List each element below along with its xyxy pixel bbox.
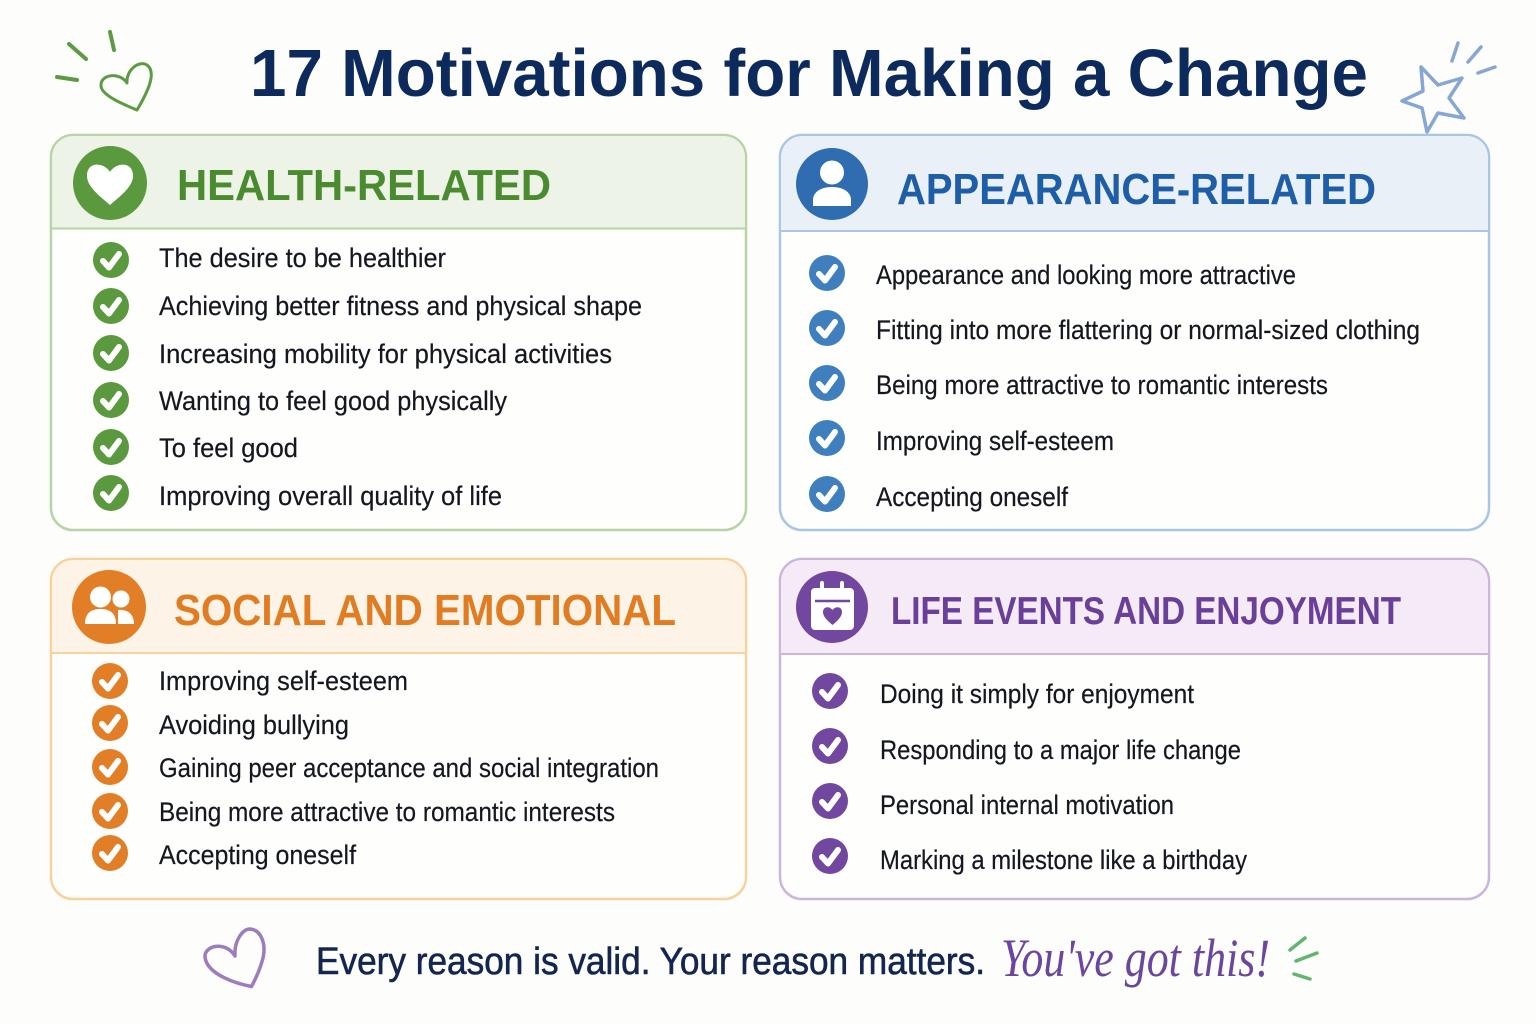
item: internal motivation: Personal internal motivation <box>880 790 1174 820</box>
icon: two people in orange circle <box>72 570 146 644</box>
item: better fitness <box>93 288 642 324</box>
item: to feel good: To feel good <box>159 433 298 463</box>
item: appearance <box>809 255 1296 291</box>
panel: health-related <box>51 135 746 530</box>
heading: social and emotional: SOCIAL AND EMOTIONAL <box>174 586 676 635</box>
panel: social and emotional <box>51 559 746 899</box>
item: quality of life: Improving overall quality of life <box>159 481 502 511</box>
title: 17 Motivations for Making a Change <box>250 36 1368 111</box>
item: romantic interests: Being more attractive to romantic interests <box>876 370 1328 400</box>
item: romantic interests: Being more attractive to romantic interests <box>159 797 615 827</box>
item: internal motivation <box>812 783 1174 820</box>
item: enjoyment: Doing it simply for enjoyment <box>880 679 1194 709</box>
item: avoiding bullying: Avoiding bullying <box>159 710 349 740</box>
item: quality of life <box>93 475 502 511</box>
item: milestone: Marking a milestone like a birthday <box>880 845 1247 875</box>
item: self-esteem <box>92 663 408 699</box>
item: self-esteem: Improving self-esteem <box>159 666 408 696</box>
icon: green rays <box>1290 938 1317 979</box>
item: accepting oneself <box>92 835 356 871</box>
item: appearance: Appearance and looking more attractive <box>876 260 1296 290</box>
item: feel good physically: Wanting to feel good physically <box>159 386 507 416</box>
item: better fitness: Achieving better fitness and physical shape <box>159 291 642 321</box>
item: peer acceptance: Gaining peer acceptance and social integration <box>159 753 659 783</box>
item: accepting oneself: Accepting oneself <box>876 482 1068 512</box>
item: self-esteem: Improving self-esteem <box>876 426 1114 456</box>
item: increasing mobility <box>93 335 612 371</box>
item: romantic interests <box>92 793 615 829</box>
icon: white heart in green circle <box>73 146 147 220</box>
item: romantic interests <box>809 365 1328 401</box>
item: self-esteem <box>809 420 1114 456</box>
item: avoiding bullying <box>92 705 349 741</box>
icon: person in blue circle <box>796 148 868 220</box>
item: increasing mobility: Increasing mobility for physical activities <box>159 339 612 369</box>
item: clothing: Fitting into more flattering or normal-sized clothing <box>876 315 1420 345</box>
item: clothing <box>809 310 1420 346</box>
item: feel good physically <box>93 382 507 418</box>
item: milestone <box>812 838 1247 875</box>
icon: blue doodle star with rays <box>1402 43 1495 132</box>
icon: green doodle heart with rays <box>57 32 151 110</box>
item: accepting oneself: Accepting oneself <box>159 840 356 870</box>
panel: appearance-related <box>780 135 1489 530</box>
script message: You've got this! <box>1001 928 1270 988</box>
icon: calendar with heart in purple circle <box>796 571 868 643</box>
item: major life change: Responding to a major life change <box>880 735 1241 765</box>
heading: life events and enjoyment: LIFE EVENTS AND ENJOYMENT <box>891 590 1401 633</box>
item: the desire to be healthier <box>93 242 446 278</box>
footer message: Every reason is valid. Your reason matters. <box>316 941 985 983</box>
icon: purple doodle heart <box>205 929 264 986</box>
item: to feel good <box>93 429 298 465</box>
item: the desire to be healthier: The desire to be healthier <box>159 243 446 273</box>
heading: appearance-related: APPEARANCE-RELATED <box>897 165 1376 214</box>
item: accepting oneself <box>809 476 1068 512</box>
item: enjoyment <box>812 673 1194 709</box>
heading: health-related: HEALTH-RELATED <box>177 161 551 210</box>
item: major life change <box>812 728 1241 765</box>
item: peer acceptance <box>92 749 659 785</box>
panel: life events and enjoyment <box>780 559 1489 899</box>
